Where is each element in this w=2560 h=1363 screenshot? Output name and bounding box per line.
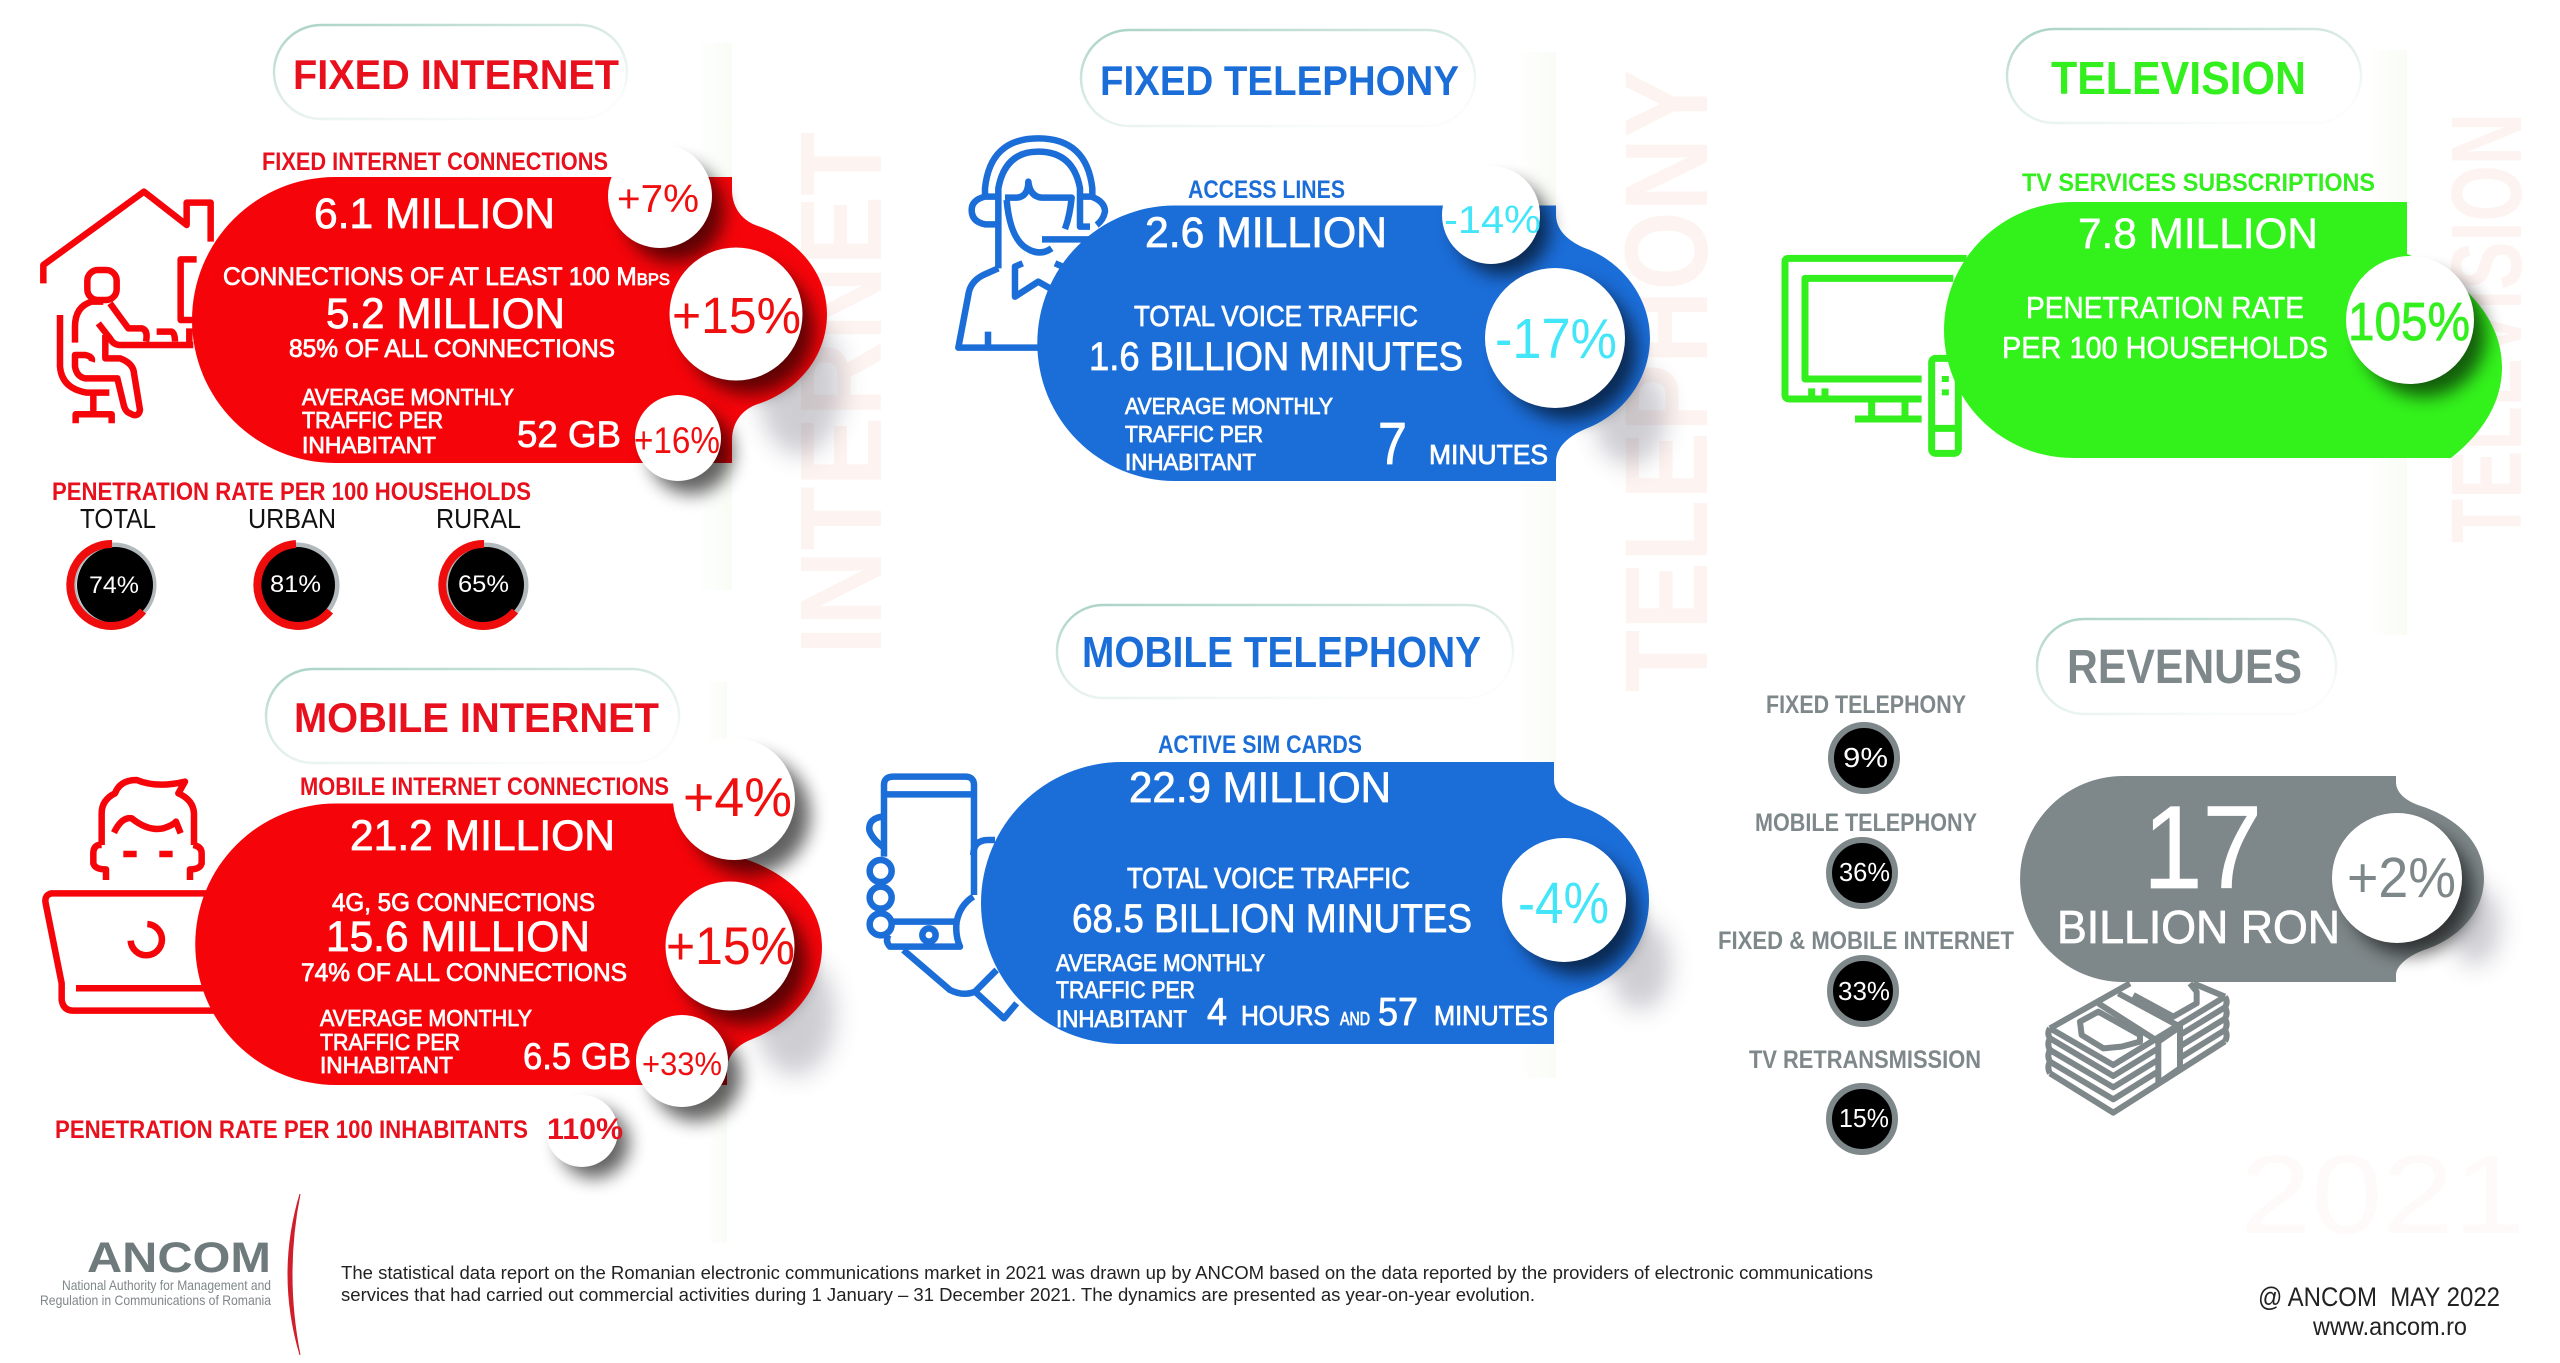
penetration rate per 100 inhabitants [55,1095,629,1178]
stat: 4G and 5G connections: 15.6 MILLION [326,913,590,961]
stat: average monthly traffic: INHABITANT [1125,449,1256,475]
blue stats shape [981,762,1649,1044]
footnote text block: services that had carried out commercial activities during 1 January – 31 December 2021. The dynamics are presented as year-on-year evolution. [341,1285,1535,1305]
donut: fixed telephony 9% [1766,691,1966,791]
donut: mobile telephony 36% [1755,809,1977,906]
stat: average monthly traffic: AVERAGE MONTHLY [1125,393,1333,419]
heading pill: fixed internet: FIXED INTERNET [293,51,619,98]
badge: +7% [608,144,724,262]
watermark: 2021: 2021 [2240,1132,2525,1257]
stat: average monthly traffic [1125,393,1548,477]
donut: total 74%: 74% [89,572,139,599]
stat: connections: 6.1 MILLION [314,190,555,238]
badge: +16%: +16% [634,420,720,461]
stat: average monthly traffic: 52 GB [517,414,621,455]
stat: access lines: 2.6 MILLION [1145,209,1387,257]
stat: 100 Mbps connections: 85% OF ALL CONNECTIONS [289,335,615,363]
watermark: INTERNET: INTERNET [776,132,906,655]
heading pill: fixed telephony [1081,30,1475,126]
icon: stack of banknotes [2048,983,2227,1113]
heading pill: revenues: REVENUES [2067,641,2302,694]
badge: +15% [666,882,807,1025]
stat: average monthly traffic: AVERAGE MONTHLY [1056,950,1265,977]
donut: fixed and mobile internet 33% [1718,927,2014,1024]
stat: 100 Mbps connections: 5.2 MILLION [326,290,565,338]
stat: connections: 21.2 MILLION [350,812,615,860]
donut: rural 65%: RURAL [436,503,521,534]
stat: average monthly traffic: TRAFFIC PER [320,1029,460,1055]
stat: average monthly traffic [1056,950,1548,1034]
stat: active SIM cards: 22.9 MILLION [1129,764,1391,812]
stat: penetration rate: PER 100 HOUSEHOLDS [2002,330,2328,365]
credit and website: @ ANCOM MAY 2022 [2258,1282,2500,1312]
footnote text block [341,1263,1873,1305]
donut: mobile telephony 36%: 36% [1839,857,1890,887]
fixed internet connections label: FIXED INTERNET CONNECTIONS [262,148,608,176]
donut: fixed and mobile internet 33%: 33% [1838,976,1890,1006]
ANCOM logo: National Authority for Management and [62,1277,271,1293]
donut: total 74% [70,503,156,626]
badge: +33% [636,1015,741,1121]
icon: operator with headset [958,138,1105,348]
ANCOM logo: Regulation in Communications of Romania [40,1292,271,1308]
panel: fixed internet [43,25,842,626]
stat: average monthly traffic: 6.5 GB [523,1036,631,1077]
donut: mobile telephony 36%: MOBILE TELEPHONY [1755,809,1977,837]
heading pill: mobile telephony [1057,605,1513,698]
panel: fixed telephony [958,30,1666,481]
stat: 4G and 5G connections [301,889,627,987]
stat: average monthly traffic: AVERAGE MONTHLY [302,384,514,410]
stat: total voice traffic: TOTAL VOICE TRAFFIC [1134,301,1418,333]
badge: 105%: 105% [2348,292,2470,352]
stat: total voice traffic [1072,863,1472,941]
donut: fixed telephony 9%: FIXED TELEPHONY [1766,691,1966,719]
credit and website [2258,1282,2500,1341]
badge: +2%: +2% [2347,846,2456,910]
icon: person with laptop [45,780,217,1011]
stat: total voice traffic [1089,301,1463,379]
heading pill: fixed telephony: FIXED TELEPHONY [1100,57,1459,104]
badge: -17% [1485,268,1637,420]
icon: hand holding phone [869,777,1017,1018]
stat: total voice traffic: 1.6 BILLION MINUTES [1089,335,1463,379]
ANCOM logo [40,1194,300,1355]
icon: television and remote [1785,258,1967,453]
stat: average monthly traffic: 57 [1378,991,1418,1034]
mobile internet connections label: MOBILE INTERNET CONNECTIONS [300,773,669,801]
TV services subscriptions label: TV SERVICES SUBSCRIPTIONS [2022,169,2375,197]
stat: 4G and 5G connections: 74% OF ALL CONNECTIONS [301,959,627,987]
stat: average monthly traffic: MINUTES [1434,1000,1548,1031]
stat: 100 Mbps connections: CONNECTIONS OF AT LEAST 100 MBPS [223,263,670,291]
badge: -14% [1442,166,1550,275]
badge: +15% [670,248,814,394]
heading pill: television [2007,29,2361,123]
panel: television [1785,29,2502,458]
badge: +4% [673,738,810,875]
badge: -17%: -17% [1495,307,1617,371]
stat: 4G and 5G connections: 4G, 5G CONNECTIONS [332,889,595,917]
stat: total revenues: 17 [2143,782,2262,914]
stat: average monthly traffic [320,1005,631,1078]
heading pill: fixed internet [274,25,627,119]
icon: person at desk in house [43,192,211,423]
donut: fixed and mobile internet 33%: FIXED & MOBILE INTERNET [1718,927,2014,955]
faint vertical stripes [695,43,2407,1243]
stat: average monthly traffic: 7 [1378,411,1407,477]
grey stats shape [2020,776,2484,982]
ANCOM logo: ANCOM [87,1234,271,1282]
blue stats shape [1037,206,1650,481]
stat: average monthly traffic: 4 [1207,991,1227,1034]
access lines label: ACCESS LINES [1188,176,1345,204]
donut: TV retransmission 15%: 15% [1839,1103,1889,1133]
donut: urban 81%: 81% [270,571,321,598]
badge: -14%: -14% [1444,199,1541,242]
stat: penetration rate: PENETRATION RATE [2026,290,2304,325]
stat: average monthly traffic: TRAFFIC PER [1056,977,1195,1004]
stat: average monthly traffic: TRAFFIC PER [1125,421,1263,447]
donut: TV retransmission 15%: TV RETRANSMISSION [1749,1046,1981,1074]
badge: +15%: +15% [666,917,795,976]
penetration rate per 100 inhabitants: PENETRATION RATE PER 100 INHABITANTS [55,1116,528,1144]
heading pill: revenues [2037,619,2336,714]
badge: +15%: +15% [672,287,801,344]
badge: +7%: +7% [617,178,699,221]
stat: average monthly traffic: TRAFFIC PER [302,407,443,433]
heading pill: mobile internet [266,669,679,763]
stat: total voice traffic: TOTAL VOICE TRAFFIC [1127,863,1410,895]
stat: average monthly traffic: AND [1340,1009,1370,1029]
stat: 100 Mbps connections [223,263,670,363]
panel: mobile telephony [869,605,1670,1044]
stat: average monthly traffic: MINUTES [1429,439,1548,470]
badge: +33%: +33% [642,1046,722,1082]
badge: -4% [1502,838,1638,975]
panel: mobile internet [45,669,835,1178]
panel: revenues [1718,619,2500,1152]
badge: -4%: -4% [1518,871,1609,936]
heading pill: mobile internet: MOBILE INTERNET [294,694,659,741]
badge: 105% [2346,256,2486,397]
donut: urban 81% [248,503,337,626]
donut: rural 65% [436,503,526,626]
penetration rate per 100 inhabitants: 110% [547,1113,623,1146]
badge: +4%: +4% [683,766,792,828]
stat: average monthly traffic: INHABITANT [320,1052,453,1078]
penetration rate label: PENETRATION RATE PER 100 HOUSEHOLDS [52,478,531,506]
heading pill: television: TELEVISION [2051,52,2306,104]
donut: TV retransmission 15% [1749,1046,1981,1152]
heading pill: mobile telephony: MOBILE TELEPHONY [1082,628,1481,677]
active SIM cards label: ACTIVE SIM CARDS [1158,731,1362,759]
donut: rural 65%: 65% [458,571,509,598]
stat: average monthly traffic: INHABITANT [1056,1006,1187,1033]
badge: +2% [2332,813,2473,955]
credit and website: www.ancom.ro [2312,1313,2467,1341]
donut: total 74%: TOTAL [80,503,156,534]
green stats shape [1944,202,2502,458]
donut: fixed telephony 9%: 9% [1843,742,1888,773]
red stats shape [192,177,827,463]
stat: average monthly traffic [302,384,621,458]
stat: average monthly traffic: INHABITANT [302,432,436,458]
stat: total revenues [2057,782,2340,953]
footnote text block: The statistical data report on the Romanian electronic communications market in 2021 was drawn up by ANCOM based on the data reported by the providers of electronic communications [341,1263,1873,1283]
badge: +16% [634,395,733,494]
stat: penetration rate [2002,290,2328,365]
stat: average monthly traffic: HOURS [1241,1000,1330,1031]
donut: urban 81%: URBAN [248,503,336,534]
stat: average monthly traffic: AVERAGE MONTHLY [320,1005,532,1031]
stat: total revenues: BILLION RON [2057,901,2340,953]
red stats shape [195,804,822,1085]
stat: total voice traffic: 68.5 BILLION MINUTES [1072,897,1472,941]
stat: TV subscriptions: 7.8 MILLION [2078,210,2318,258]
